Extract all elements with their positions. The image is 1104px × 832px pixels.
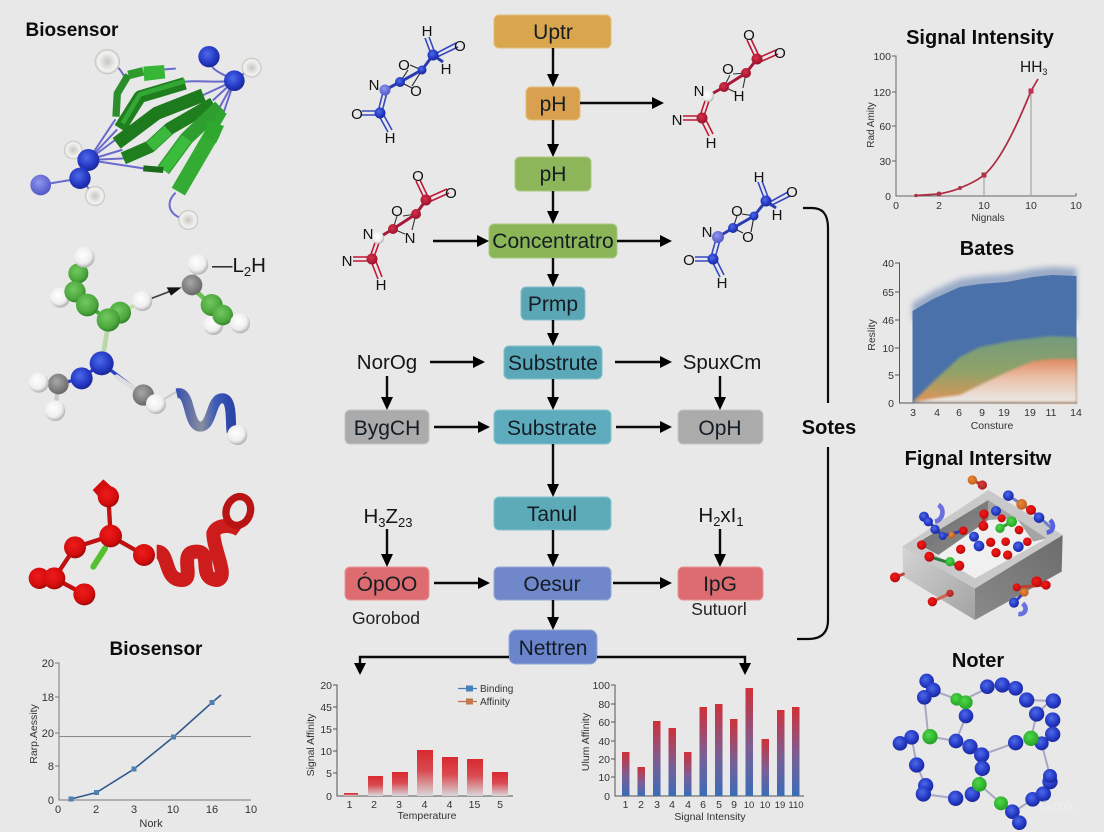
molecule: blue top left: H <box>385 130 395 147</box>
axes <box>333 685 513 796</box>
label: SpuxCm: SpuxCm <box>683 351 761 374</box>
x tick labels: 19 <box>998 407 1010 419</box>
axis label: Ulum Affinity: Ulum Affinity <box>580 712 592 771</box>
y tick labels: 0 <box>885 191 891 203</box>
legend <box>458 684 513 708</box>
box: OpOO <box>345 567 429 600</box>
box: Substrute <box>504 346 602 379</box>
box: Tanul <box>494 497 611 530</box>
axes <box>55 663 251 800</box>
box: BygCH: BygCH <box>354 417 420 440</box>
arrow: Concentratro to right molecule <box>617 235 672 247</box>
heading: Biosensor: Biosensor <box>26 20 119 41</box>
label: NorOg: NorOg <box>357 351 417 374</box>
label: Sutuorl: Sutuorl <box>691 599 747 619</box>
box: OpH <box>678 410 763 444</box>
label: H2xI1: xI <box>720 504 736 527</box>
panel: green and blue ball-and-stick molecule <box>29 247 266 445</box>
arrow: Tanul to Oesur <box>547 530 559 567</box>
y tick labels <box>873 51 891 203</box>
arrow: Oesur to IpG <box>613 577 672 589</box>
panel: signal intensity curve <box>866 27 1082 224</box>
molecule: red top right: N <box>694 83 704 100</box>
x tick labels: 2 <box>936 200 942 212</box>
y tick labels: 20 <box>42 728 54 740</box>
arrow: BygCH to Substrate <box>434 421 490 433</box>
x tick labels: 6 <box>956 407 962 419</box>
box: Uptr: Uptr <box>533 21 573 44</box>
arrow: pH to pH <box>547 120 559 157</box>
x tick labels: 19 <box>775 800 785 811</box>
arrow: Substrute to Substrate <box>547 379 559 410</box>
y tick labels: 10 <box>320 746 332 758</box>
bars <box>344 750 508 796</box>
y tick labels: 15 <box>320 724 332 736</box>
panel: Noter network molecule <box>893 650 1061 830</box>
y tick labels: 60 <box>879 121 891 133</box>
molecule: blue mid right: O <box>731 203 743 220</box>
y tick labels: 120 <box>873 87 891 99</box>
axis label: Signal Intensity: Signal Intensity <box>674 811 746 823</box>
arrow: pH to right molecule <box>580 97 664 109</box>
molecule: blue top left: O <box>351 106 363 123</box>
y tick labels: 40 <box>882 258 894 270</box>
y tick labels <box>592 680 610 803</box>
box: pH green <box>515 157 591 191</box>
label: L2H: H <box>251 254 266 277</box>
box: Prmp: Prmp <box>528 293 578 316</box>
molecule: red top right: H <box>706 135 716 152</box>
curve <box>914 79 1038 197</box>
heading: Noter: Noter <box>952 650 1004 672</box>
axis label: Nignals: Nignals <box>971 213 1005 224</box>
panel: beta-sheet protein <box>26 20 262 230</box>
x tick labels: 2 <box>638 799 644 811</box>
x tick labels: 9 <box>979 407 985 419</box>
axis label: Reslity: Reslity <box>866 319 878 351</box>
reference line <box>59 736 251 738</box>
panel: central flow diagram <box>345 15 856 675</box>
x tick labels: 15 <box>469 799 480 811</box>
y tick labels: 40 <box>598 736 610 748</box>
x tick labels: 0 <box>55 804 61 816</box>
x tick labels: 0 <box>893 200 899 212</box>
label: H3Z23: H <box>363 505 378 528</box>
axes <box>895 263 1077 403</box>
x tick labels: 10 <box>245 804 257 816</box>
arrow: H3Z23 to OpOO <box>381 529 393 567</box>
molecule: blue mid right: N <box>702 224 712 241</box>
box: IpG <box>678 567 763 600</box>
arrow: NorOg to BygCH <box>381 376 393 410</box>
axis label: Temperature: Temperature <box>398 810 457 822</box>
arrow: Concentratro to Prmp <box>547 258 559 287</box>
x tick labels: 1 <box>623 799 629 811</box>
arrow: Nettren to left bar chart <box>354 657 509 675</box>
box: pH green: pH <box>540 163 566 186</box>
box: Prmp <box>521 287 585 320</box>
molecule: blue mid right: H <box>754 169 764 186</box>
box: Concentratro: Concentratro <box>492 230 614 253</box>
molecule: blue top left: H <box>441 61 451 78</box>
axis label: Consture: Consture <box>971 420 1013 432</box>
x tick labels: 10 <box>1070 200 1082 212</box>
blue area <box>912 275 1076 403</box>
y tick labels <box>42 658 54 807</box>
molecule: red mid left: H <box>376 277 386 294</box>
x tick labels: 11 <box>1046 407 1057 419</box>
x tick labels: 5 <box>497 799 503 811</box>
molecule: red mid left: N <box>363 226 373 243</box>
arrow: Substrate to OpH <box>616 421 672 433</box>
x tick labels: 110 <box>788 800 804 811</box>
molecule: blue top left: O <box>454 38 466 55</box>
label: H3Z23: 23 <box>398 515 413 530</box>
molecule model <box>29 247 250 445</box>
box: pH orange: pH <box>540 93 566 116</box>
arrow: Oesur to Nettren <box>547 600 559 630</box>
y tick labels: 20 <box>320 680 332 692</box>
label: H3Z23: Z <box>386 505 398 528</box>
y tick labels: 10 <box>598 772 610 784</box>
molecule: red top right: O <box>743 27 755 44</box>
molecule: red mid left: O <box>445 185 457 202</box>
box: IpG: IpG <box>703 573 737 596</box>
y tick labels: 0 <box>604 791 610 803</box>
molecule: blue mid right: H <box>717 275 727 292</box>
x tick labels <box>55 804 257 816</box>
x tick labels: 4 <box>669 799 675 811</box>
arrow: H2xI1 to IpG <box>714 529 726 567</box>
watermark: Grok: Grok <box>1040 798 1076 815</box>
y tick labels: 46 <box>882 315 894 327</box>
y tick labels: 20 <box>598 754 610 766</box>
x tick labels: 9 <box>731 799 737 811</box>
x tick labels: 4 <box>447 799 453 811</box>
heading: Bates: Bates <box>960 238 1014 260</box>
bracket: Sotes <box>797 208 828 639</box>
molecule: blue top left: N <box>369 77 379 94</box>
x tick labels: 10 <box>1025 200 1037 212</box>
arrow: pH to Concentratro <box>547 191 559 224</box>
label: H3Z23: 3 <box>378 515 386 530</box>
y tick labels: 80 <box>598 699 610 711</box>
box: Uptr <box>494 15 611 48</box>
x tick labels: 14 <box>1070 407 1082 419</box>
molecule: red mid left: O <box>412 168 424 185</box>
panel: 3D box with particles <box>890 448 1063 620</box>
molecule: blue mid right: O <box>786 184 798 201</box>
y tick labels: 5 <box>888 370 894 382</box>
arrow: Substrute to SpuxCm <box>615 356 672 368</box>
box: Tanul: Tanul <box>527 503 577 526</box>
molecule: red top right: H <box>734 88 744 105</box>
molecule: blue mid right: H <box>772 207 782 224</box>
molecule: blue top left: H <box>422 23 432 40</box>
y tick labels: 30 <box>879 156 891 168</box>
x tick labels: 10 <box>744 800 754 811</box>
arrow: Prmp to Substrute <box>547 320 559 346</box>
molecule: blue top left: O <box>410 83 422 100</box>
x tick labels: 3 <box>396 799 402 811</box>
annotation: HH3: 3 <box>1042 67 1047 77</box>
molecule: red mid left <box>342 168 457 294</box>
guide lines <box>984 91 1031 196</box>
x tick labels: 19 <box>1024 407 1036 419</box>
x tick labels: 3 <box>910 407 916 419</box>
x tick labels: 1 <box>347 799 353 811</box>
orange area <box>912 359 1076 402</box>
box: Oesur <box>494 567 611 600</box>
molecule: red top right: O <box>774 45 786 62</box>
x tick labels: 6 <box>700 799 706 811</box>
legend: Affinity <box>480 697 510 708</box>
axis label: Signal Affinity: Signal Affinity <box>305 713 317 776</box>
annotation: HH3: HH <box>1020 59 1042 76</box>
x tick labels: 10 <box>978 200 990 212</box>
arrow: NorOg to Substrute <box>430 356 485 368</box>
heading: Signal Intensity: Signal Intensity <box>906 27 1055 49</box>
arrow: Substrate to Tanul <box>547 444 559 497</box>
label: H2xI1: 2 <box>713 514 720 529</box>
molecule: blue mid right: O <box>742 229 754 246</box>
x tick labels: 4 <box>685 799 691 811</box>
y tick labels: 5 <box>326 768 332 780</box>
box: OpOO: ÓpOO <box>357 573 417 596</box>
box: Nettren: Nettren <box>519 637 587 660</box>
heading: Fignal Intersitw: Fignal Intersitw <box>905 448 1052 470</box>
arrow: Nettren to right bar chart <box>597 657 751 675</box>
panel: red ball-and-stick molecule with helix <box>29 479 255 605</box>
x tick labels: 4 <box>934 407 940 419</box>
y tick labels: 8 <box>48 761 54 773</box>
y tick labels: 0 <box>888 398 894 410</box>
box: OpH: OpH <box>698 417 742 440</box>
legend: Binding <box>480 684 513 695</box>
x tick labels: 3 <box>131 804 137 816</box>
x tick labels: 10 <box>760 800 770 811</box>
x tick labels: 5 <box>716 799 722 811</box>
box: Substrate: Substrate <box>507 417 597 440</box>
y tick labels: 100 <box>873 51 891 63</box>
x tick labels: 10 <box>167 804 179 816</box>
y tick labels <box>882 258 894 410</box>
panel: Bates area chart <box>866 238 1082 432</box>
y tick labels: 20 <box>42 658 54 670</box>
x tick labels: 2 <box>371 799 377 811</box>
x tick labels <box>623 799 804 811</box>
y tick labels: 0 <box>326 791 332 803</box>
box: Substrate <box>494 410 611 444</box>
molecule: blue top left: O <box>398 57 410 74</box>
y tick labels <box>320 680 332 803</box>
arrow: left molecule to Concentratro <box>433 235 489 247</box>
x tick labels: 3 <box>654 799 660 811</box>
y tick labels: 65 <box>882 287 894 299</box>
arrow: OpOO to Oesur <box>434 577 490 589</box>
molecule: blue mid right: O <box>683 252 695 269</box>
label: L2H: 2 <box>244 264 251 279</box>
molecule: red top right <box>672 27 786 152</box>
protein ribbon model <box>30 46 262 230</box>
box with particles <box>890 475 1063 620</box>
molecule: red mid left: N <box>405 230 415 247</box>
x tick labels: 16 <box>206 804 218 816</box>
y tick labels: 18 <box>42 692 54 704</box>
bars <box>622 688 800 796</box>
y tick labels: 100 <box>592 680 610 692</box>
green area <box>912 336 1076 403</box>
axis label: Rad Amity: Rad Amity <box>866 102 877 148</box>
label: Sotes: Sotes <box>802 417 856 439</box>
panel: binding line chart <box>28 639 257 830</box>
box: BygCH <box>345 410 429 444</box>
arrow: SpuxCm to OpH <box>714 376 726 410</box>
panel: right bar chart <box>580 680 804 823</box>
molecular network <box>893 674 1061 830</box>
label: L2H: —L <box>212 254 244 277</box>
y tick labels: 60 <box>598 717 610 729</box>
axes <box>892 56 1076 196</box>
molecule: red mid left: N <box>342 253 352 270</box>
molecule: red top right: O <box>722 61 734 78</box>
box: Substrute: Substrute <box>508 352 598 375</box>
data line <box>68 695 221 802</box>
y tick labels: 45 <box>320 702 332 714</box>
x tick labels: 2 <box>93 804 99 816</box>
box: pH orange <box>526 87 580 120</box>
axis label: Nork: Nork <box>139 818 163 830</box>
label: H2xI1: H <box>698 504 713 527</box>
x tick labels <box>347 799 503 811</box>
y tick labels: 0 <box>48 795 54 807</box>
heading: Biosensor: Biosensor <box>110 639 203 660</box>
molecule: red mid left: O <box>391 203 403 220</box>
box: Nettren <box>509 630 597 664</box>
axes <box>611 685 804 796</box>
molecule: blue mid right <box>683 169 798 292</box>
x tick labels <box>910 407 1082 419</box>
box: Oesur: Oesur <box>523 573 581 596</box>
label: H2xI1: 1 <box>736 514 744 529</box>
molecule: red top right: N <box>672 112 682 129</box>
box: Concentratro <box>489 224 617 258</box>
x tick labels <box>893 200 1082 212</box>
axis label: y: Rarp.Aessity <box>28 703 40 764</box>
label: Gorobod: Gorobod <box>352 608 420 628</box>
blue area halo <box>912 267 1076 320</box>
arrow: Uptr to pH <box>547 48 559 87</box>
panel: left bar chart <box>305 680 513 822</box>
x tick labels: 4 <box>422 799 428 811</box>
y tick labels: 10 <box>882 343 894 355</box>
molecule: blue top left <box>351 23 466 147</box>
